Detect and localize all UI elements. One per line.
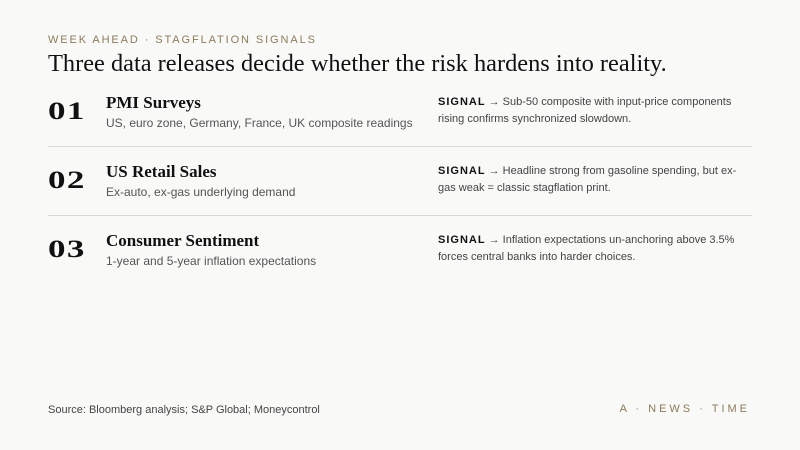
row: PMI Surveys [48, 93, 752, 147]
number 01: 01 [48, 98, 86, 125]
row: Consumer Sentiment [48, 231, 734, 268]
description: Ex-auto, ex-gas underlying demand [106, 185, 295, 199]
heading: PMI Surveys [106, 93, 201, 112]
signal text: SIGNAL → Headline strong from gasoline spending, but ex-gas weak = classic stagflation print. [438, 165, 736, 194]
description: US, euro zone, Germany, France, UK composite readings [106, 116, 413, 130]
number 02: 02 [48, 167, 86, 194]
kicker: WEEK AHEAD · STAGFLATION SIGNALS [48, 34, 317, 46]
title: Three data releases decide whether the risk hardens into reality. [48, 50, 667, 77]
heading: US Retail Sales [106, 162, 216, 181]
signal text: SIGNAL → Sub-50 composite with input-price components rising confirms synchronized slowdown. [438, 96, 731, 125]
signal text: SIGNAL → Inflation expectations un-anchoring above 3.5% forces central banks into harder choices. [438, 234, 734, 263]
brand: A · NEWS · TIME [620, 403, 750, 415]
source: Source: Bloomberg analysis; S&P Global; Moneycontrol [48, 404, 320, 416]
description: 1-year and 5-year inflation expectations [106, 254, 316, 268]
row: US Retail Sales [48, 162, 752, 216]
number 03: 03 [48, 236, 86, 263]
heading: Consumer Sentiment [106, 231, 259, 250]
